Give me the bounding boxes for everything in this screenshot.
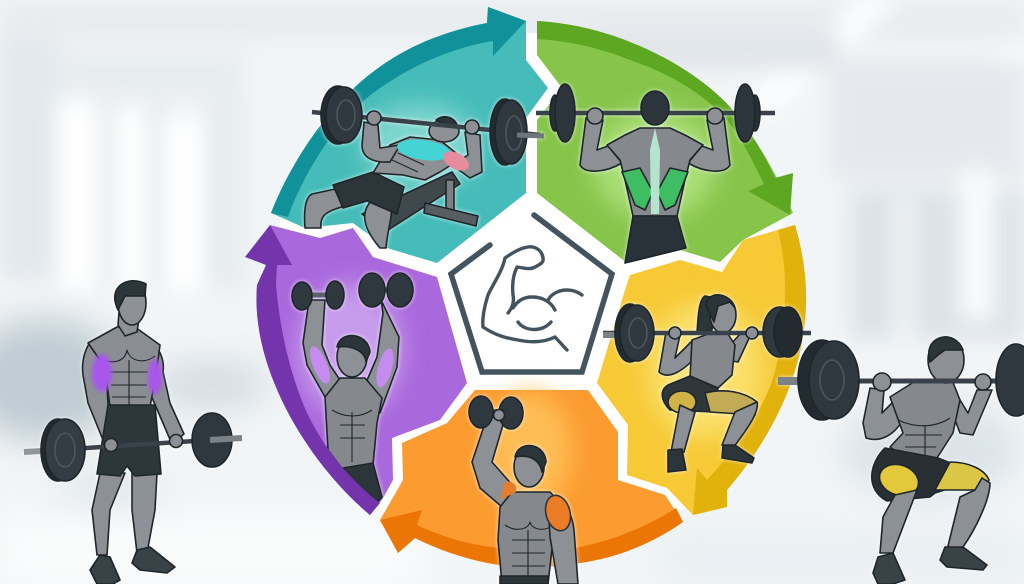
figure: standing barbell curl [24,281,242,584]
center pentagon with muscle icon [451,215,612,372]
figure: man squat [778,337,1024,584]
arms [863,388,903,439]
shorts [872,448,985,501]
wheel white base [270,33,794,557]
figure: dumbbell shoulder press [469,396,578,584]
shorts [97,405,161,476]
lower legs [880,490,917,553]
barbell [536,111,775,115]
torso [890,380,960,462]
bench [362,172,460,232]
barbell [778,378,1024,384]
panel: teal segment, chest [271,7,548,263]
torso [498,492,562,584]
shorts [500,576,548,584]
arms [362,122,400,162]
left dumbbell [305,292,336,298]
biceps [306,344,334,386]
muscle: chest [396,136,452,164]
figure: overhead dumbbell press [292,273,413,502]
arrow: yellow [693,225,806,515]
lower legs [671,405,695,452]
torso [373,137,462,180]
raised arm [472,417,515,507]
yellow thighs [875,459,923,501]
legs [305,188,342,228]
shorts [343,463,382,502]
panel: purple segment, biceps [256,225,467,515]
barbell [312,112,540,135]
shorts [333,172,404,214]
torso [607,128,703,216]
shoes [90,555,120,584]
head [928,337,964,383]
arrow: purple [245,225,380,515]
deltoids [500,482,516,500]
icon: flexed bicep [483,247,582,350]
legs [92,473,125,555]
arms [303,300,340,397]
dumbbell [484,409,510,415]
barbell [603,331,811,335]
hips and shorts [662,376,718,412]
thighs [668,391,696,413]
shorts [625,216,686,263]
arms [580,118,622,171]
head [118,281,146,325]
neck [118,312,140,336]
ponytail [697,296,716,332]
arms [83,342,112,440]
head [710,297,736,333]
torso [88,327,160,407]
figure: bench press [305,86,544,248]
torso [690,334,735,388]
arrow: teal [271,7,526,217]
head [641,91,669,125]
shoes [873,553,905,584]
arrow: orange [380,508,683,567]
head [337,337,367,377]
panel: green segment, back [537,21,793,263]
panel: yellow segment, squat [597,225,806,515]
biceps glow [92,354,112,392]
arms [659,332,697,375]
head [514,447,544,487]
barbell [24,438,242,452]
lats [622,168,653,210]
figure: overhead press back view [536,84,775,263]
torso [325,378,382,470]
lowered arm [548,500,578,584]
panel: orange segment, shoulders [380,390,683,567]
right dumbbell [372,288,400,292]
shoes [668,449,686,472]
head [429,120,459,142]
arrow: green [537,21,793,215]
figure: woman squat [603,295,811,472]
